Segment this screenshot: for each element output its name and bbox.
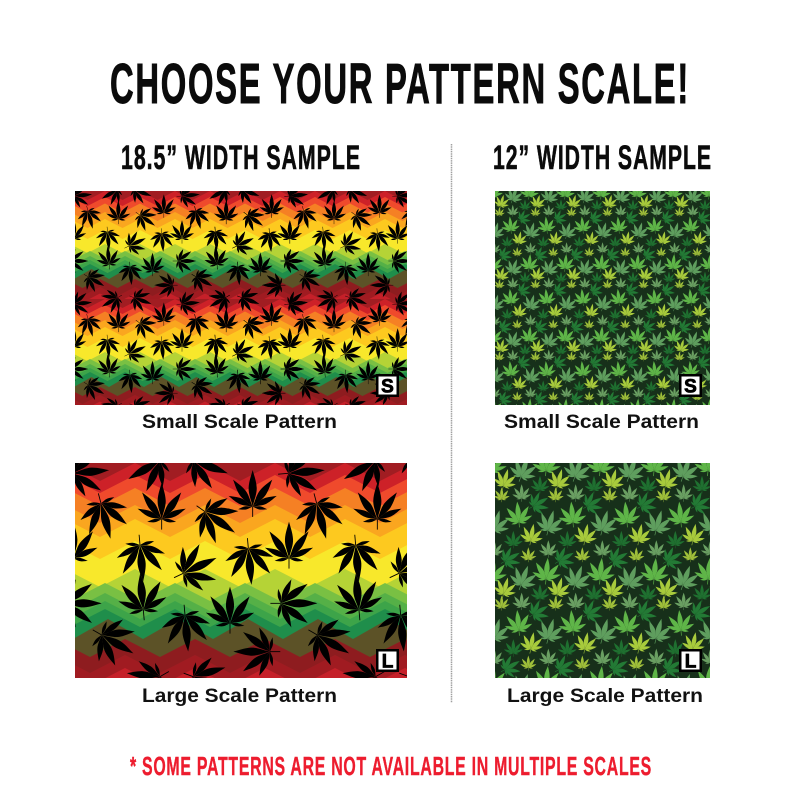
caption: small scale left: Small Scale Pattern bbox=[142, 412, 337, 433]
badge: L right bbox=[679, 649, 702, 672]
badge: S right: S bbox=[684, 376, 697, 398]
panel: 12 inch small scale green pattern bbox=[495, 191, 710, 405]
heading: 18.5 inch width sample: 18.5” WIDTH SAMPLE bbox=[121, 139, 361, 177]
panel: 12 inch large scale green pattern bbox=[495, 463, 710, 678]
badge: S bbox=[376, 374, 399, 398]
badge: S: S bbox=[381, 376, 394, 398]
badge: L: L bbox=[382, 652, 394, 672]
caption: large scale left: Large Scale Pattern bbox=[142, 686, 337, 707]
caption: large scale right: Large Scale Pattern bbox=[507, 686, 703, 707]
panel: 18.5 inch large scale rainbow pattern bbox=[75, 463, 407, 678]
panel: 18.5 inch small scale rainbow pattern bbox=[75, 191, 407, 405]
badge: L right: L bbox=[685, 652, 697, 672]
badge: L bbox=[376, 649, 399, 672]
caption: small scale right: Small Scale Pattern bbox=[504, 412, 699, 433]
badge: S right bbox=[679, 374, 702, 398]
